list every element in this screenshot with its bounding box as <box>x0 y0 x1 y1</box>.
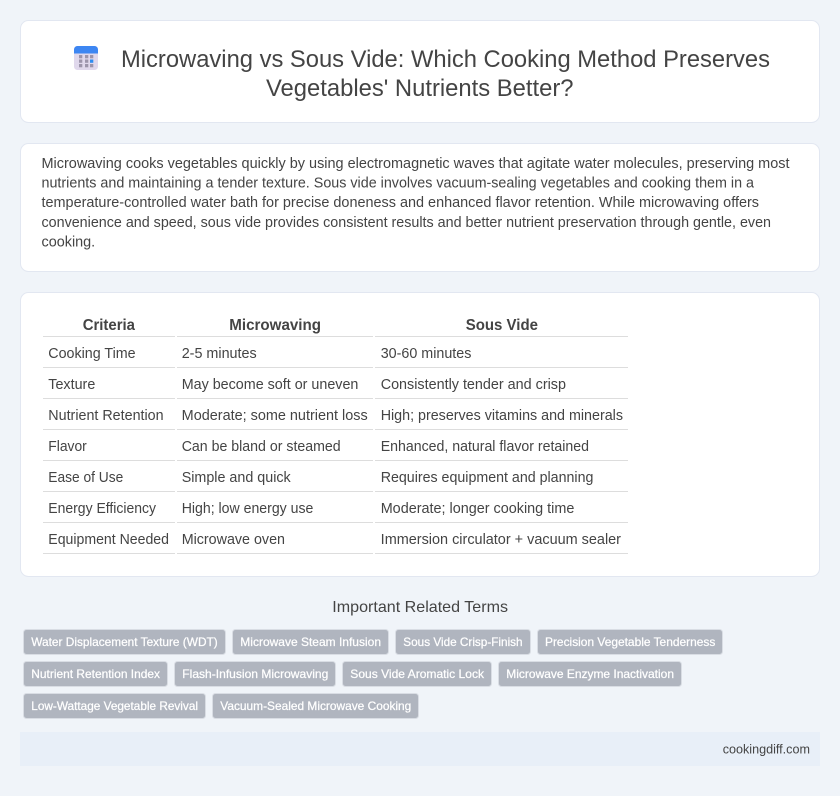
icon: calendar <box>74 46 98 70</box>
row: cooking time: Cooking Time <box>48 346 136 362</box>
tag <box>174 662 336 686</box>
related term tags <box>24 630 722 718</box>
row: energy efficiency: Moderate; longer cooking time <box>381 501 574 517</box>
tag: Flash-Infusion Microwaving <box>182 667 328 681</box>
tag: Vacuum-Sealed Microwave Cooking <box>220 699 411 713</box>
footer site name: cookingdiff.com <box>723 741 810 756</box>
tag: Nutrient Retention Index <box>31 667 160 681</box>
description text: temperature-controlled water bath for precise doneness and enhanced flavor retention. While microwaving offers <box>42 195 759 211</box>
description text: convenience and speed, sous vide provides consistent results and better nutrient preservation through gentle, even <box>42 215 771 231</box>
description text <box>42 156 790 250</box>
table header row: Sous Vide <box>466 317 538 334</box>
tag <box>24 662 168 686</box>
row: ease of use: Simple and quick <box>182 470 291 486</box>
description text: cooking. <box>42 234 95 250</box>
row: flavor: Can be bland or steamed <box>182 439 341 455</box>
row: equipment needed: Immersion circulator + vacuum sealer <box>381 532 621 548</box>
row: ease of use <box>43 470 628 492</box>
tag <box>24 694 206 718</box>
tag: Sous Vide Crisp-Finish <box>403 635 523 649</box>
title <box>121 46 770 102</box>
row: nutrient retention <box>43 408 628 430</box>
title: Vegetables' Nutrients Better? <box>266 75 574 102</box>
title: Microwaving vs Sous Vide: Which Cooking Method Preserves <box>121 46 770 73</box>
footer <box>20 732 820 766</box>
table header row: Microwaving <box>229 317 321 334</box>
heading: related terms: Important Related Terms <box>332 599 508 616</box>
panel: comparison table <box>20 292 820 576</box>
row: texture: Texture <box>48 377 95 393</box>
tag: Microwave Steam Infusion <box>240 635 381 649</box>
row: ease of use: Ease of Use <box>48 470 123 486</box>
row: ease of use: Requires equipment and planning <box>381 470 593 486</box>
tag: Sous Vide Aromatic Lock <box>350 667 485 681</box>
description text: Microwaving cooks vegetables quickly by using electromagnetic waves that agitate water molecules, preserving most <box>42 156 790 172</box>
row: texture: May become soft or uneven <box>182 377 358 393</box>
row: energy efficiency: High; low energy use <box>182 501 313 517</box>
tag <box>232 630 388 654</box>
tag <box>498 662 682 686</box>
row: nutrient retention: High; preserves vitamins and minerals <box>381 408 623 424</box>
tag: Low-Wattage Vegetable Revival <box>31 699 198 713</box>
tag: Precision Vegetable Tenderness <box>545 635 715 649</box>
panel: description <box>20 144 820 272</box>
row: energy efficiency: Energy Efficiency <box>48 501 157 517</box>
tag: Microwave Enzyme Inactivation <box>506 667 674 681</box>
tag <box>24 630 226 654</box>
tag <box>342 662 492 686</box>
tag <box>538 630 722 654</box>
table header row: Criteria <box>83 317 135 334</box>
tag <box>396 630 530 654</box>
row: cooking time: 30-60 minutes <box>381 346 471 362</box>
row: flavor: Flavor <box>48 439 87 455</box>
row: equipment needed: Equipment Needed <box>48 532 169 548</box>
table header row <box>43 317 628 336</box>
row: nutrient retention: Moderate; some nutrient loss <box>182 408 368 424</box>
row: equipment needed <box>43 532 628 554</box>
tag: Water Displacement Texture (WDT) <box>31 635 218 649</box>
row: flavor: Enhanced, natural flavor retained <box>381 439 589 455</box>
row: energy efficiency <box>43 501 628 522</box>
row: cooking time: 2-5 minutes <box>182 346 257 362</box>
row: texture <box>43 377 628 398</box>
description text: nutrients and maintaining a tender texture. Sous vide involves vacuum-sealing vegetables and cooking them in a <box>42 176 754 192</box>
tag <box>212 694 418 718</box>
row: nutrient retention: Nutrient Retention <box>48 408 164 424</box>
row: cooking time <box>43 346 628 368</box>
row: equipment needed: Microwave oven <box>182 532 285 548</box>
panel: header <box>20 20 820 122</box>
row: flavor <box>43 439 628 460</box>
row: texture: Consistently tender and crisp <box>381 377 566 393</box>
